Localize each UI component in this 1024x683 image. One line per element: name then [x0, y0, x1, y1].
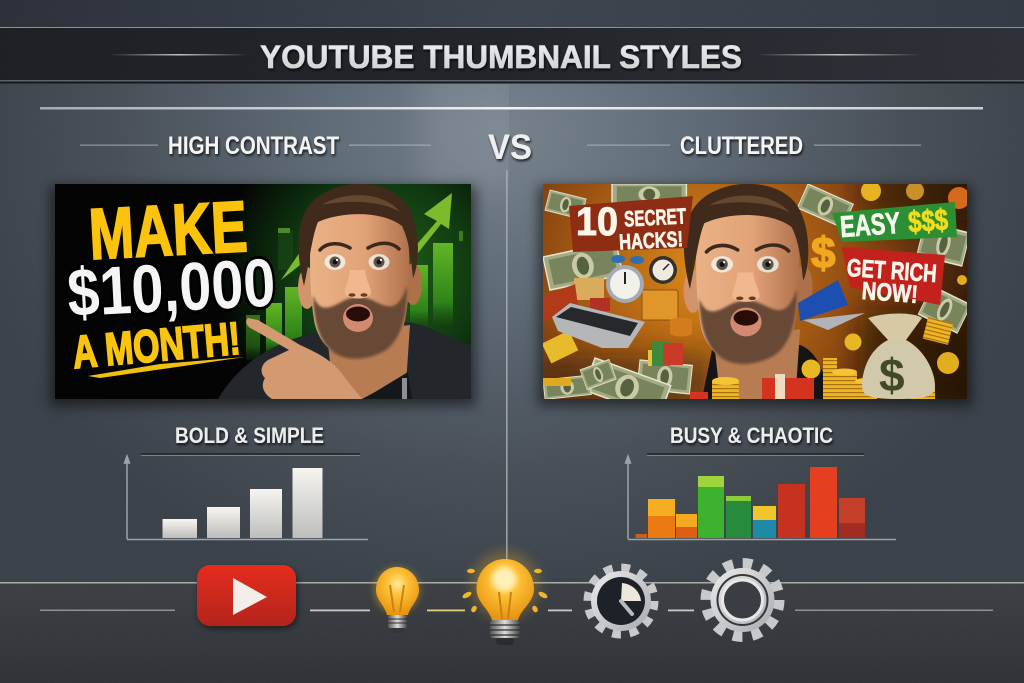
top divider line: [40, 107, 983, 110]
money bag: [862, 314, 935, 401]
banner: get rich now: [842, 247, 945, 309]
chart bars: [162, 468, 322, 538]
icon: glowing light bulb: [461, 551, 549, 645]
banner: 10 secret hacks: [569, 196, 693, 255]
title: YOUTUBE THUMBNAIL STYLES: [260, 39, 742, 75]
banner: easy money: $$$: [907, 204, 949, 239]
red gift box: [690, 374, 814, 399]
gold dollar sign: $: [811, 229, 835, 278]
headline text: $10,000: [65, 245, 277, 331]
alarm clocks: [606, 255, 677, 303]
pointing hand: [246, 318, 362, 399]
icon: small light bulb: [373, 566, 421, 633]
chart axes: [124, 456, 368, 540]
green up arrow: [281, 193, 452, 280]
dashed connector line: [40, 610, 993, 611]
icon: youtube play button: [197, 565, 298, 629]
icon: gear with clock: [589, 569, 653, 633]
bar chart: bold and simple: [124, 456, 368, 540]
headline text: [68, 200, 276, 370]
banner: easy money: [832, 202, 957, 244]
heading: high contrast: HIGH CONTRAST: [168, 132, 339, 160]
gold coin stacks: [712, 181, 970, 399]
thumbnail shadows: [50, 186, 972, 406]
chart bars: [636, 467, 865, 538]
yellow underline stroke: [88, 357, 245, 378]
headline text: MAKE: [87, 187, 249, 275]
heading: cluttered: CLUTTERED: [680, 132, 803, 160]
green glow backdrop: [228, 184, 471, 355]
heading: vs: VS: [488, 128, 532, 167]
panel: cluttered thumbnail: [530, 170, 980, 417]
presenter: [684, 184, 830, 405]
laptop left: [552, 303, 645, 348]
banner: get rich now: GET RICH: [846, 254, 938, 288]
panel: high contrast thumbnail: [55, 184, 471, 399]
cash piles: [543, 184, 971, 417]
banner: 10 secret hacks: SECRET: [623, 203, 687, 232]
money bag: $: [879, 349, 905, 401]
banner: easy money: EASY: [839, 207, 901, 244]
dark collage shading: [543, 184, 967, 399]
banner: 10 secret hacks: HACKS!: [618, 226, 684, 255]
chart axes: [626, 456, 896, 540]
icon: gear with ring: [706, 564, 778, 636]
laptop right: [798, 280, 865, 330]
subheading: bold and simple: BOLD & SIMPLE: [175, 423, 324, 448]
bar chart: busy and chaotic: [626, 456, 896, 540]
subheading: busy and chaotic: BUSY & CHAOTIC: [670, 423, 833, 448]
banner: get rich now: NOW!: [861, 277, 919, 309]
center vertical divider: [506, 170, 508, 562]
scattered gifts and blocks: [542, 278, 692, 386]
banner: 10 secret hacks: 10: [576, 200, 618, 244]
light rays: [461, 569, 549, 613]
rising green bars: [246, 228, 463, 360]
headline text: A MONTH!: [70, 312, 242, 378]
presenter: [218, 184, 471, 399]
